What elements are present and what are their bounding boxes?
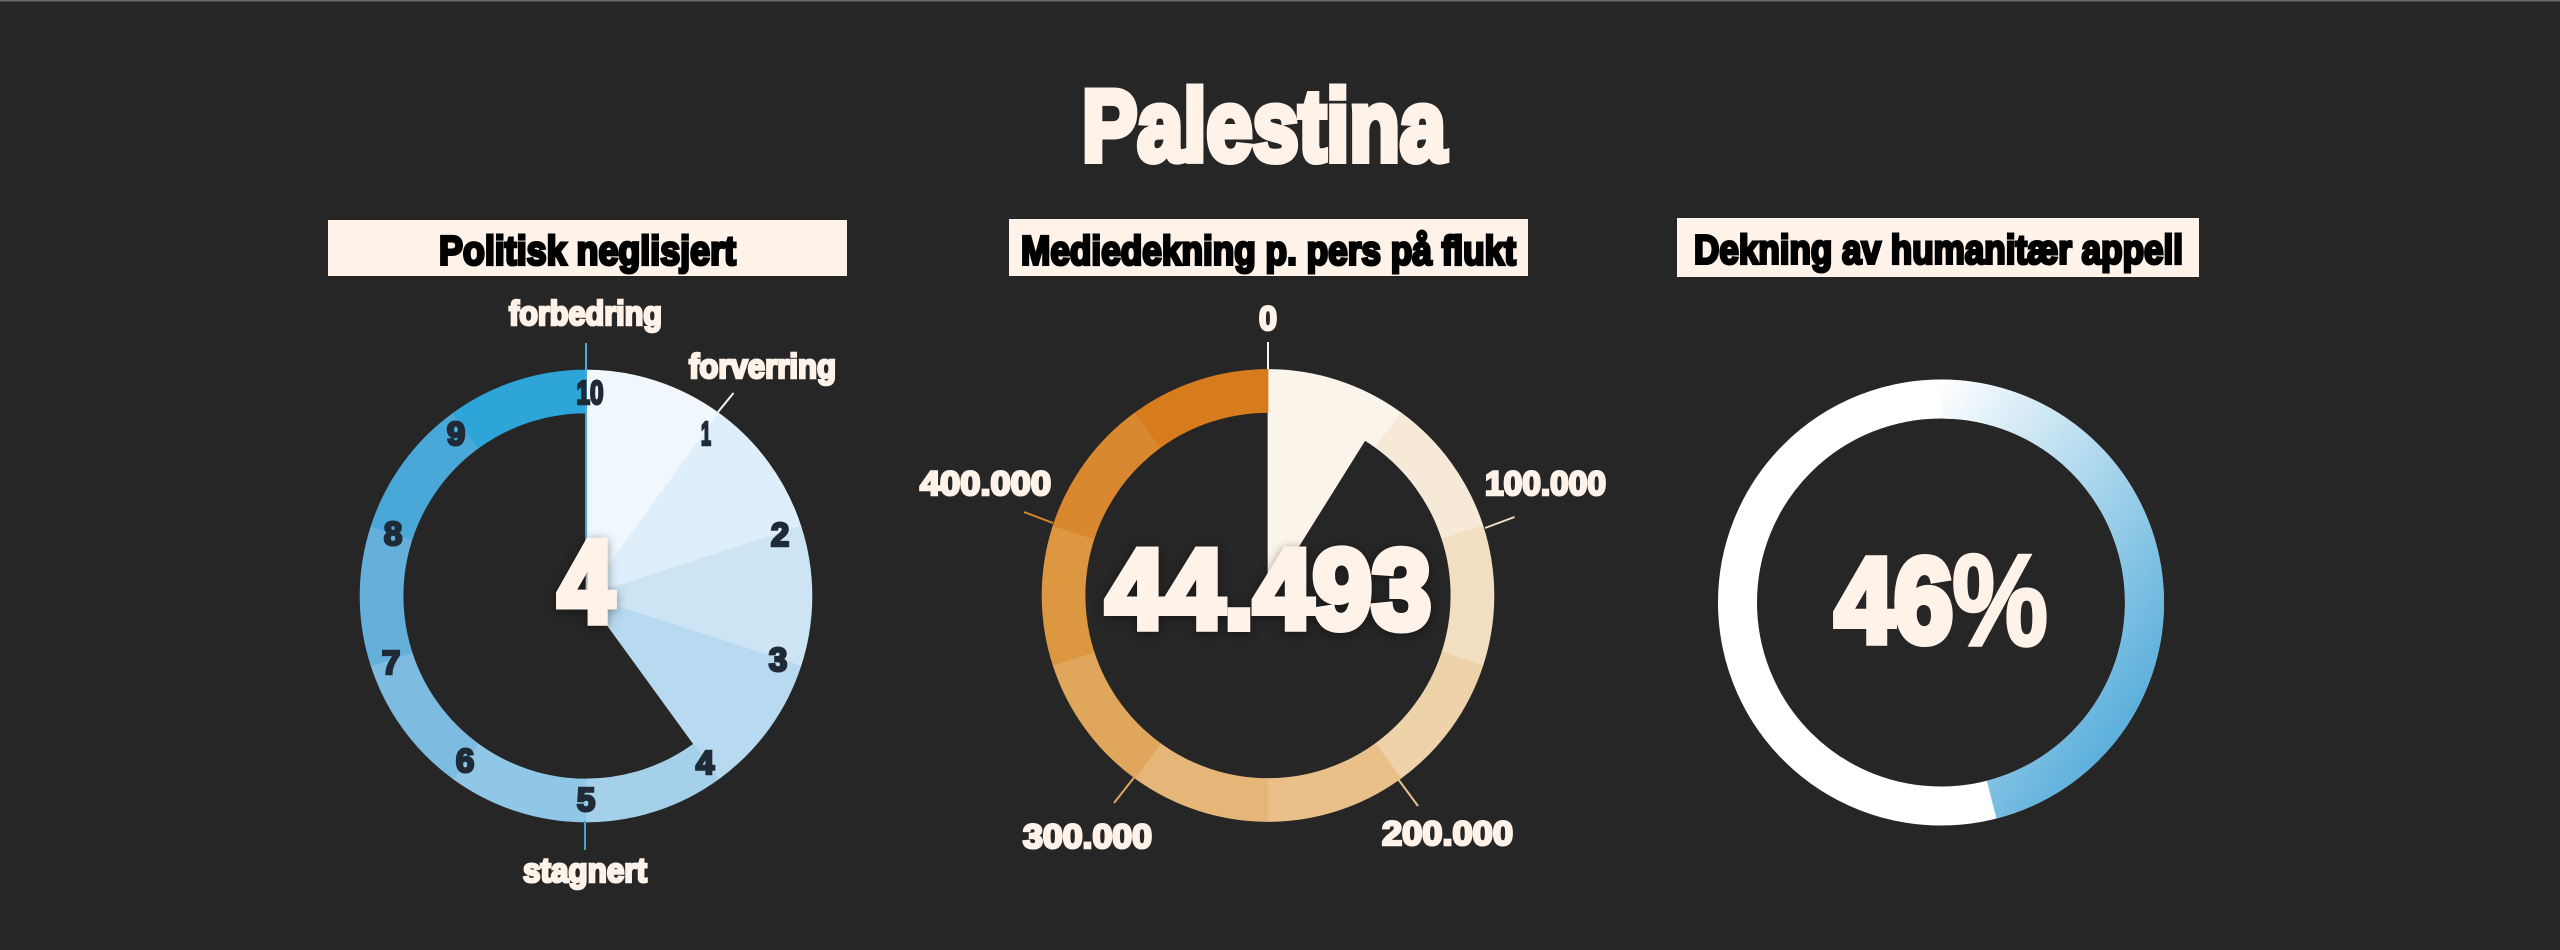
scale numbers: 5 — [577, 781, 595, 818]
scale numbers: 4 — [696, 744, 715, 781]
scale numbers: 8 — [384, 515, 402, 552]
tick: forverring — [718, 393, 734, 412]
ticks — [1024, 342, 1514, 806]
scale numbers: 1 — [701, 415, 711, 452]
value: 4: 4 — [558, 517, 614, 647]
value: 46%: 46 — [1835, 534, 1953, 668]
scale labels: 200.000 — [1382, 815, 1513, 853]
scale numbers: 3 — [769, 641, 787, 678]
scale numbers — [382, 374, 789, 818]
scale labels: 0 — [1259, 300, 1277, 338]
title: Palestina — [1082, 70, 1447, 182]
value: 46% — [1835, 527, 2048, 673]
label: forbedring: forbedring — [509, 295, 662, 333]
scale labels: 300.000 — [1023, 818, 1152, 856]
scale numbers: 9 — [447, 415, 465, 452]
gauge: pie wedges 1 to 4 and ring 5 to 10 — [360, 370, 812, 822]
scale numbers: 6 — [456, 742, 474, 779]
heading: politisk neglisjert: Politisk neglisjert — [439, 228, 736, 274]
panel: mediedekning — [920, 219, 1606, 856]
value: 44.493: 44.493 — [1106, 527, 1431, 652]
scale numbers: 10 — [576, 374, 604, 411]
tick: stagnert — [584, 821, 586, 850]
scale labels: 100.000 — [1485, 465, 1606, 503]
label: stagnert: stagnert — [523, 852, 647, 890]
heading: mediedekning: Mediedekning p. pers på flukt — [1021, 228, 1516, 274]
scale labels — [920, 300, 1606, 856]
heading: politisk neglisjert — [328, 220, 847, 276]
heading: dekning av humanitaer appell: Dekning av humanitær appell — [1694, 226, 2183, 272]
gauge: 46 percent ring — [1738, 379, 2164, 818]
value: 46%: % — [1952, 527, 2048, 673]
label: forverring: forverring — [689, 348, 836, 386]
scale numbers: 7 — [382, 644, 400, 681]
gauge: ring segments with value wedge — [1042, 370, 1494, 822]
scale numbers: 2 — [771, 516, 789, 553]
tick: forbedring — [585, 343, 587, 545]
panel: politisk neglisjert — [328, 220, 847, 890]
scale labels: 400.000 — [920, 465, 1051, 503]
heading: dekning av humanitaer appell — [1677, 218, 2199, 277]
panel: dekning av humanitaer appell — [1677, 218, 2199, 818]
